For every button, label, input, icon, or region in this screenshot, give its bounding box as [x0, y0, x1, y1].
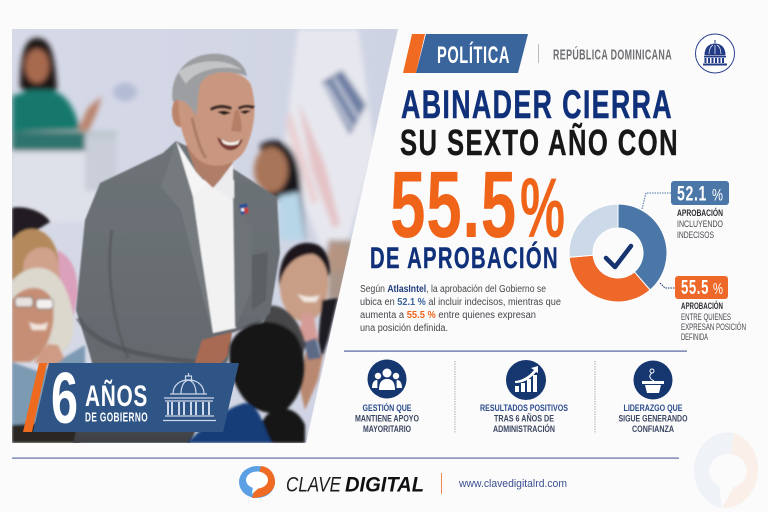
text block: explanation: ubica en 52.1 % al incluir indecisos, mientras que: [360, 297, 562, 308]
feature: gestión: MAYORITARIO: [363, 424, 411, 435]
feature: liderazgo: LIDERAZGO QUE: [624, 403, 682, 414]
callout: 55.5 %: %: [713, 281, 723, 298]
feature: resultados: RESULTADOS POSITIVOS: [480, 403, 568, 414]
callout: 55.5 %: [660, 276, 746, 342]
icon: people group: [368, 360, 406, 398]
right audience: [279, 243, 330, 300]
callout: 52.1 %: INCLUYENDO: [677, 219, 723, 229]
callout: 52.1 %: %: [712, 186, 723, 204]
text block: explanation: aumenta a 55.5 % entre quienes expresan: [360, 310, 536, 321]
callout: 55.5 %: ENTRE QUIENES: [681, 312, 731, 322]
feature: resultados: TRAS 6 AÑOS DE: [494, 414, 554, 424]
blue shirt: [187, 403, 272, 443]
feature: resultados: ADMINISTRACIÓN: [493, 423, 555, 435]
callout: 52.1 %: 52.1: [677, 182, 707, 206]
number 6: 6: [51, 359, 78, 439]
panel: event photo: [12, 29, 402, 443]
collar: [176, 141, 204, 194]
brand name: [286, 474, 424, 496]
callout: 55.5 %: DEFINIDA: [681, 332, 708, 342]
callout: 52.1 %: [642, 181, 729, 240]
banner: 6 años de gobierno: [23, 359, 239, 439]
feature: liderazgo: CONFIANZA: [632, 424, 674, 435]
left audience: [12, 207, 50, 245]
feature: liderazgo: SIGUE GENERANDO: [618, 414, 688, 424]
text block: explanation: una posición definida.: [360, 323, 448, 334]
man suit: [73, 141, 280, 443]
website url: www.clavedigitalrd.com: [458, 478, 567, 490]
lapels: [162, 159, 210, 322]
text block: explanation: Según AtlasIntel, la aprobación del Gobierno se: [360, 284, 546, 295]
neck: [186, 145, 233, 188]
headline line 3: DE APROBACIÓN: [370, 241, 559, 275]
feature: gestión: [355, 360, 419, 435]
icon: capitol emblem: [696, 34, 734, 73]
icon: check mark: [606, 246, 631, 267]
headline figure 55.5%: 55.5: [390, 152, 517, 258]
icon: watermark logo: [694, 432, 758, 508]
feature: liderazgo: [618, 360, 688, 435]
brand name: CLAVE: [286, 474, 342, 496]
foreground heads: [229, 322, 304, 413]
feature: resultados: [480, 360, 568, 435]
callout: 52.1 %: APROBACIÓN: [677, 207, 723, 218]
donut chart: [569, 204, 667, 302]
icon: capitol outline: [163, 373, 216, 420]
category tag: política: POLÍTICA: [437, 41, 510, 69]
callout: 55.5 %: 55.5: [681, 277, 709, 299]
callout: 52.1 %: INDECISOS: [677, 230, 714, 240]
text block: explanation: [360, 284, 562, 334]
feature: gestión: GESTIÓN QUE: [362, 402, 412, 414]
callout: 55.5 %: APROBACIÓN: [681, 300, 723, 311]
man shirt: [190, 180, 236, 333]
label años: AÑOS: [85, 379, 148, 413]
feature: gestión: MANTIENE APOYO: [355, 414, 419, 424]
icon: clave digital logo: [239, 466, 275, 498]
headline figure 55.5%: %: [520, 161, 565, 255]
icon: rising chart: [506, 360, 546, 400]
location label: REPÚBLICA DOMINICANA: [553, 46, 672, 64]
head: [171, 99, 182, 128]
brand name: DIGITAL: [345, 474, 424, 496]
hands: [195, 332, 232, 364]
category tag: política: [403, 34, 528, 73]
label de gobierno: DE GOBIERNO: [85, 410, 148, 424]
icon: podium: [634, 360, 672, 400]
divider: [538, 44, 539, 63]
